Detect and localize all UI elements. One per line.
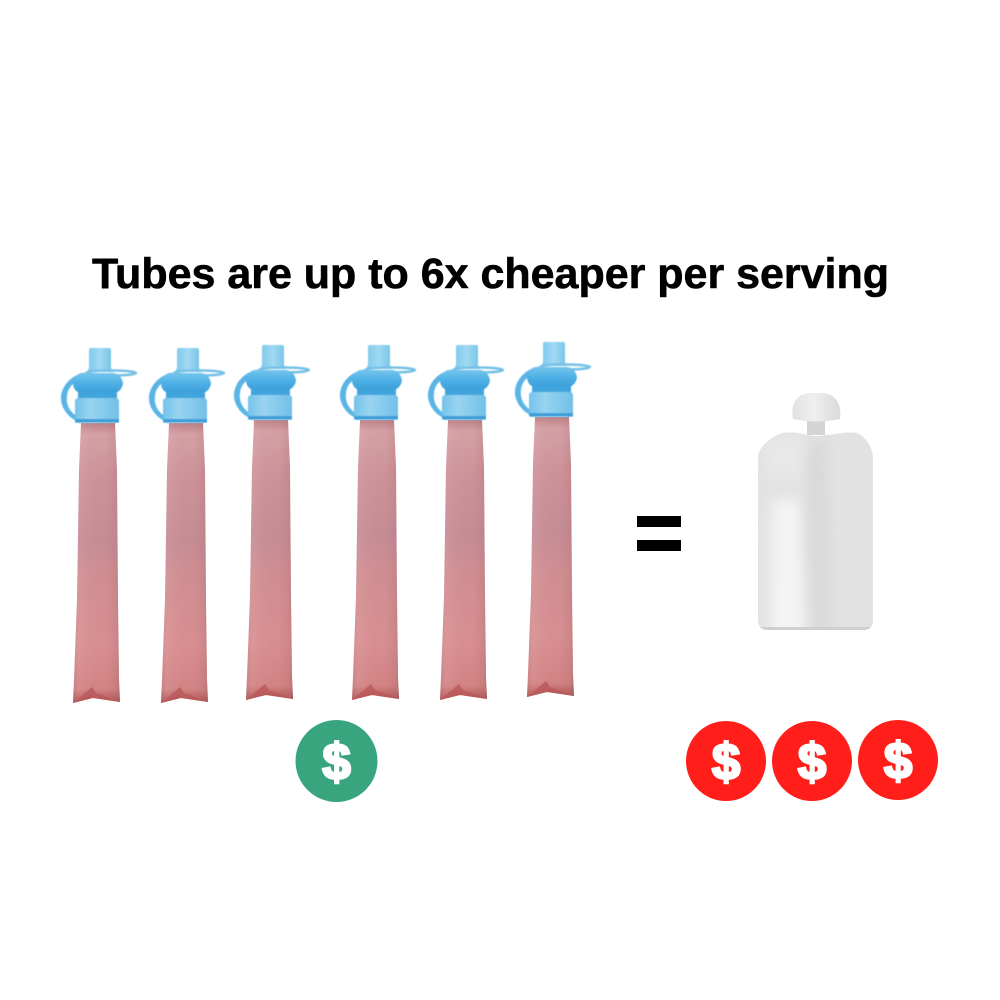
red badge 1: $ bbox=[712, 733, 740, 790]
equals sign bbox=[637, 516, 681, 551]
pouch bbox=[758, 393, 873, 630]
tube 3 bbox=[234, 345, 309, 700]
green price badge bbox=[296, 720, 378, 802]
tube 4 bbox=[340, 345, 415, 700]
red badge 3: $ bbox=[884, 732, 912, 789]
tube 2 bbox=[149, 348, 224, 703]
green price badge: $ bbox=[322, 733, 351, 790]
tube group: six tubes bbox=[61, 342, 590, 703]
title: Tubes are up to 6x cheaper per serving bbox=[92, 250, 889, 298]
red badge 2 bbox=[772, 721, 852, 801]
tube 5 bbox=[428, 345, 503, 700]
tube 1 bbox=[61, 348, 136, 703]
red price badges bbox=[686, 720, 938, 801]
red badge 1 bbox=[686, 721, 766, 801]
red badge 2: $ bbox=[798, 733, 826, 790]
red badge 3 bbox=[858, 720, 938, 800]
tube 6 bbox=[515, 342, 590, 697]
